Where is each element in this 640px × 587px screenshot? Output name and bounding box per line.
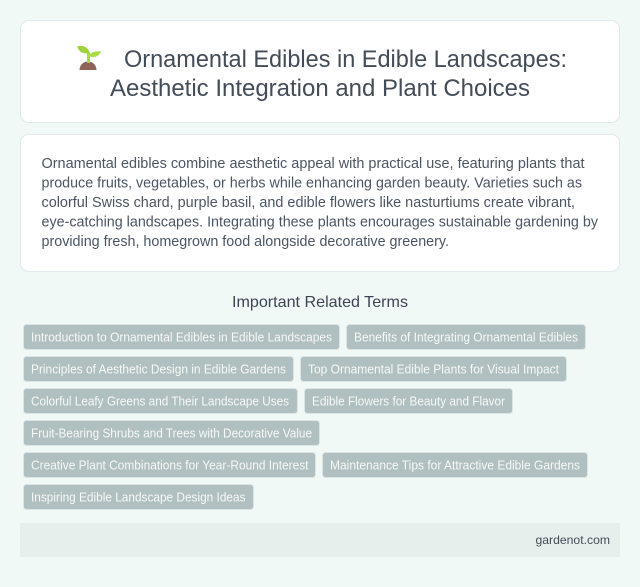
chip: principles — [24, 356, 294, 382]
chip: benefits: Benefits of Integrating Ornamental Edibles — [354, 330, 578, 344]
description text: produce fruits, vegetables, or herbs while enhancing garden beauty. Varieties such as — [42, 176, 582, 192]
chip: introduction — [24, 324, 340, 350]
description text: eye-catching landscapes. Integrating these plants encourages sustainable gardening by — [42, 214, 599, 230]
chip: design ideas: Inspiring Edible Landscape Design Ideas — [31, 490, 246, 504]
panel: related term chips — [24, 324, 588, 510]
chip: plant combinations — [24, 452, 316, 478]
panel: title card — [20, 20, 620, 122]
chip: plant combinations: Creative Plant Combinations for Year-Round Interest — [31, 458, 309, 472]
chip: principles: Principles of Aesthetic Design in Edible Gardens — [31, 362, 286, 376]
chip: fruit-bearing shrubs — [24, 420, 320, 446]
description text: Ornamental edibles combine aesthetic appeal with practical use, featuring plants that — [42, 156, 584, 172]
heading: Aesthetic Integration and Plant Choices — [110, 75, 530, 102]
description text: colorful Swiss chard, purple basil, and edible flowers like nasturtiums create vibrant, — [42, 195, 575, 211]
chip: benefits — [346, 324, 586, 350]
heading — [110, 46, 567, 102]
icon: seedling — [77, 46, 101, 70]
heading: Ornamental Edibles in Edible Landscapes: — [124, 46, 567, 73]
chip: leafy greens — [24, 388, 298, 414]
panel: description card — [20, 134, 620, 272]
section heading: important related terms: Important Related Terms — [232, 294, 408, 311]
description text: providing fresh, homegrown food alongside decorative greenery. — [42, 234, 449, 250]
chip: top plants: Top Ornamental Edible Plants for Visual Impact — [308, 362, 559, 376]
chip: edible flowers: Edible Flowers for Beauty and Flavor — [312, 394, 505, 408]
chip: fruit-bearing shrubs: Fruit-Bearing Shrubs and Trees with Decorative Value — [31, 426, 312, 440]
chip: design ideas — [24, 484, 254, 510]
chip: top plants — [300, 356, 566, 382]
chip: maintenance tips: Maintenance Tips for Attractive Edible Gardens — [330, 458, 580, 472]
chip: introduction: Introduction to Ornamental Edibles in Edible Landscapes — [31, 330, 332, 344]
chip: leafy greens: Colorful Leafy Greens and Their Landscape Uses — [31, 394, 289, 408]
footer — [20, 523, 620, 557]
description text — [42, 156, 599, 250]
chip: edible flowers — [304, 388, 512, 414]
footer source: gardenot.com — [536, 533, 610, 547]
chip: maintenance tips — [322, 452, 588, 478]
